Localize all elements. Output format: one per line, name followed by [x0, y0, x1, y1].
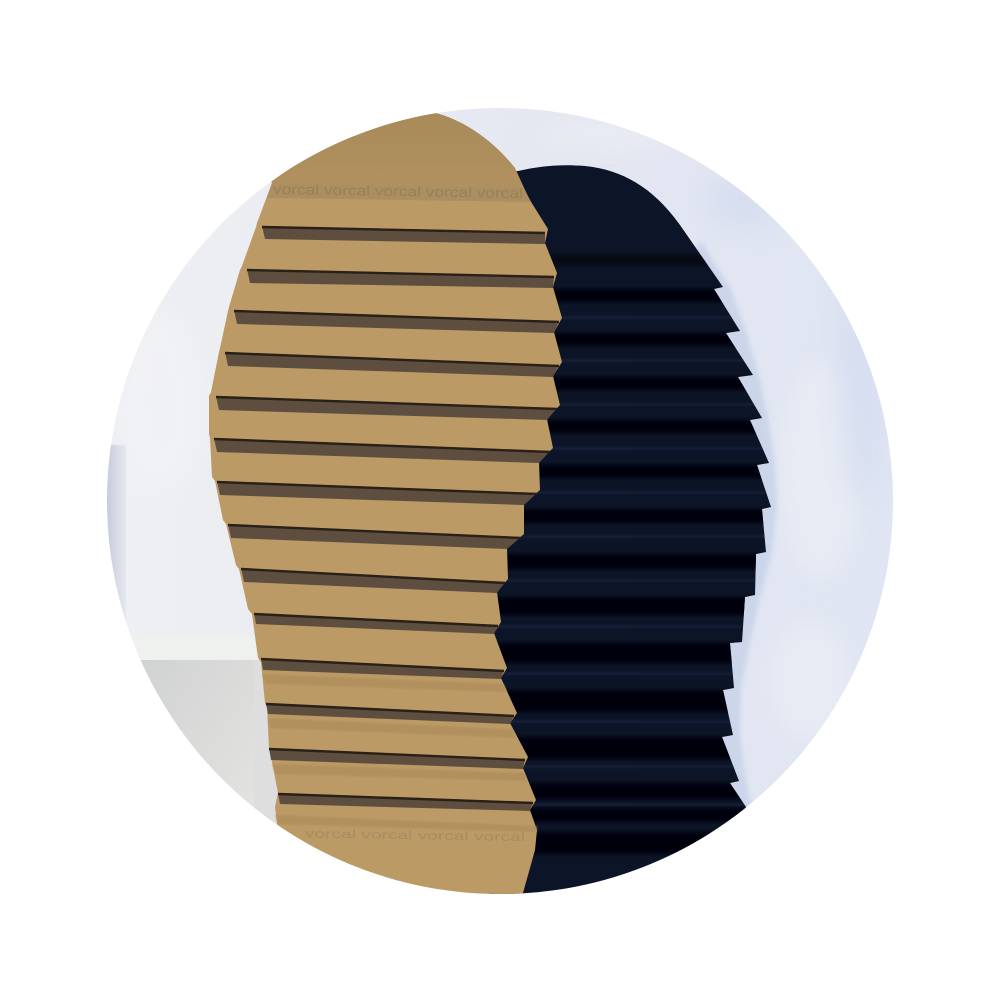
tan heel dome: [268, 113, 531, 202]
circular photo: tan and navy shoe soles against a white wall: [107, 108, 893, 894]
shaded wall edge at left: [107, 444, 126, 619]
embossed brand band: [267, 184, 531, 202]
groove dark edges: [214, 227, 559, 803]
white skirting box lower left: [140, 660, 278, 824]
tan sole grooves: [214, 226, 559, 811]
embossed toe text: vorcal vorcal vorcal vorcal: [305, 826, 525, 844]
lower ribs shading: [262, 674, 537, 832]
tan sole silhouette: [209, 100, 562, 905]
navy sole: [490, 165, 771, 894]
navy sole tread bands: [498, 252, 771, 856]
embossed brand band: vorcal vorcal vorcal vorcal vorcal: [273, 181, 523, 201]
tan sole: [209, 100, 562, 905]
wall background: [107, 108, 893, 829]
shadow of navy sole on wall: [696, 242, 778, 825]
